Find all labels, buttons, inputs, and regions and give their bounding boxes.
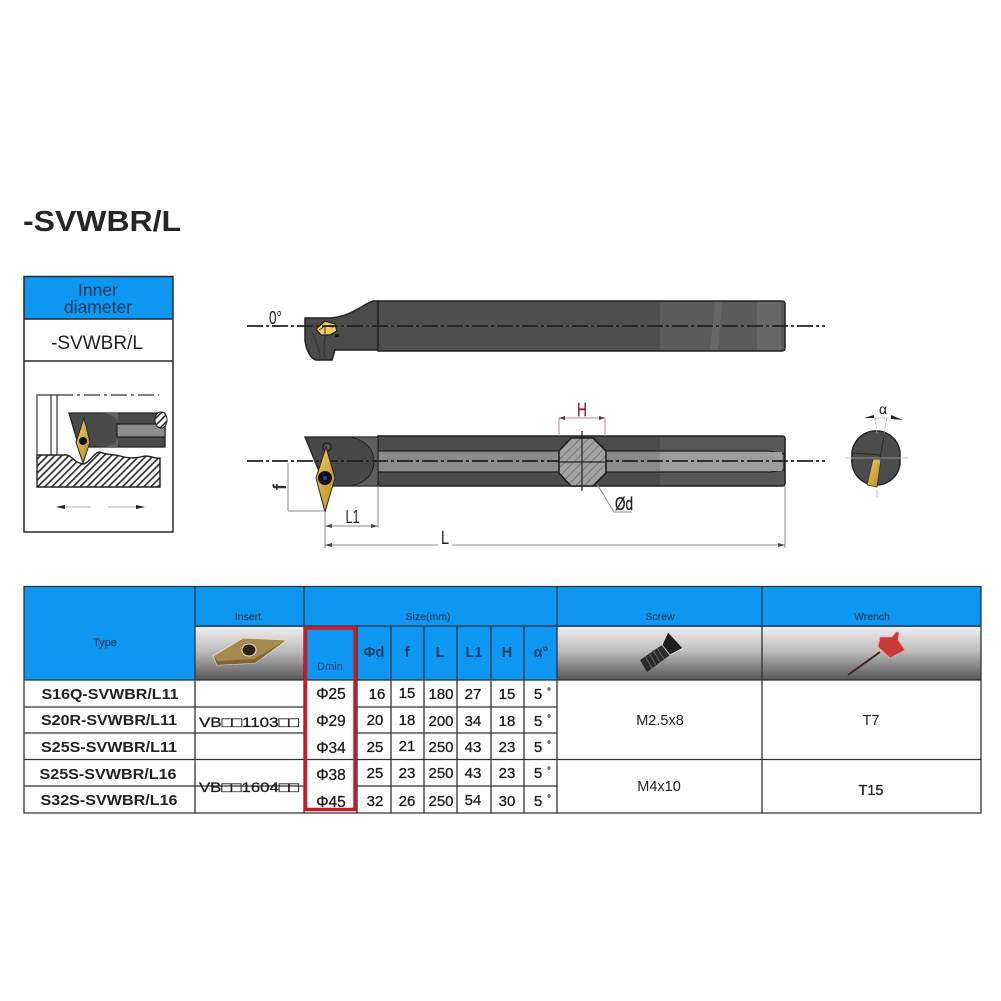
size values: 250 [428,765,454,782]
size values: 25 [367,765,383,782]
header labels: H [502,645,512,661]
size values: 5 [534,765,542,782]
size values: 23 [399,765,415,782]
dimension L: L [441,528,449,549]
table grid [24,586,981,813]
header labels: f [405,645,410,661]
dimension H: H [577,400,587,420]
dimension f [270,463,325,511]
size values: 18 [399,712,415,729]
end-view section [845,401,908,497]
tool head [305,437,378,486]
icon: boring operation diagram [37,395,167,509]
size values: 250 [428,739,454,756]
Dmin column: Φ34 [316,740,346,757]
centre line [247,325,825,327]
panel header: Inner [78,280,118,300]
Dmin column [316,686,346,811]
Dmin column: Φ25 [316,686,346,703]
screw and wrench values: T15 [858,783,884,799]
dimension Ød [597,484,633,514]
size values: 15 [499,686,515,703]
type column: S20R-SVWBR/L11 [41,712,177,729]
size values: 5 [534,686,542,703]
flat strip [374,451,784,472]
size values: 16 [369,686,385,703]
size values: 23 [499,765,515,782]
dimension Ød: Ød [615,494,633,514]
size values: 18 [499,713,515,730]
title: -SVWBR/L [23,206,181,238]
size values: ° [547,714,551,725]
size values: 25 [367,739,383,756]
screw and wrench values: T7 [863,713,879,729]
table header background [24,587,981,680]
size values: ° [547,687,551,698]
screw and wrench values: M2.5x8 [636,713,684,729]
tool shank [378,301,785,351]
panel header: diameter [64,297,132,317]
Dmin column: Φ29 [316,713,346,730]
Dmin highlight box [306,628,355,810]
type column: S32S-SVWBR/L16 [40,792,178,809]
Dmin column: Φ38 [316,767,346,784]
panel header [24,277,173,319]
header labels: α° [534,645,549,661]
panel frame [24,276,173,532]
dimension L1 [325,486,378,528]
type column [40,686,178,809]
dimension H [559,400,605,436]
header labels: Wrench [854,611,890,623]
side-view tool drawing [247,301,825,360]
size values: 54 [465,792,481,809]
size values: 250 [428,793,454,810]
size values: 180 [428,686,454,703]
header labels [93,611,890,673]
image cells [195,627,981,680]
icon: insert photo [213,638,287,665]
section circle [558,431,606,491]
screw and wrench values [636,713,884,799]
size values: 43 [465,739,481,756]
insert codes: VB□□1604□□ [199,779,300,795]
type column: S25S-SVWBR/L11 [41,739,177,756]
centre line [247,460,825,462]
size values: 5 [534,713,542,730]
size values: 23 [499,739,515,756]
angle alpha: α [879,401,887,417]
header labels: Size(mm) [406,611,450,623]
size values [367,685,551,810]
screw and wrench values: M4x10 [637,779,681,795]
size values: 5 [534,793,542,810]
size values: 20 [367,712,383,729]
dimension f: f [270,483,290,490]
size values: 5 [534,739,542,756]
size values: 26 [399,793,415,810]
size values: 15 [399,685,415,702]
header labels: Screw [645,611,675,623]
dimension L [325,486,785,549]
specification table [24,586,981,813]
icon: insert [316,447,335,512]
size values: 27 [465,686,481,703]
size values: 43 [465,765,481,782]
header labels: L [436,645,445,661]
panel type label: -SVWBR/L [51,333,143,354]
size values: 30 [499,793,515,810]
tool shank [378,436,785,486]
insert codes [199,714,300,795]
size values: ° [547,740,551,751]
type column: S25S-SVWBR/L16 [40,766,176,783]
type column: S16Q-SVWBR/L11 [42,686,178,703]
icon: wrench [848,632,905,675]
icon: insert top view [316,321,339,337]
icon: insert end [867,459,881,487]
header labels: Dmin [317,661,343,673]
size values: ° [547,794,551,805]
tool head [305,301,378,360]
angle label: 0° [269,308,282,328]
size values: 200 [428,713,454,730]
panel: inner diameter [24,276,173,532]
size values: 34 [465,713,481,730]
icon: screw [640,632,683,672]
dimension L1: L1 [346,507,360,527]
size values: 21 [399,738,415,755]
header labels: Type [93,637,117,649]
insert codes: VB□□1103□□ [199,714,300,730]
size values: ° [547,766,551,777]
Dmin column: Φ45 [316,794,346,811]
header labels: Insert [235,611,261,623]
top-view tool drawing [247,431,825,512]
header labels: Φd [364,645,384,661]
size values: 32 [367,793,383,810]
header labels: L1 [466,645,482,661]
end circle [852,431,900,485]
